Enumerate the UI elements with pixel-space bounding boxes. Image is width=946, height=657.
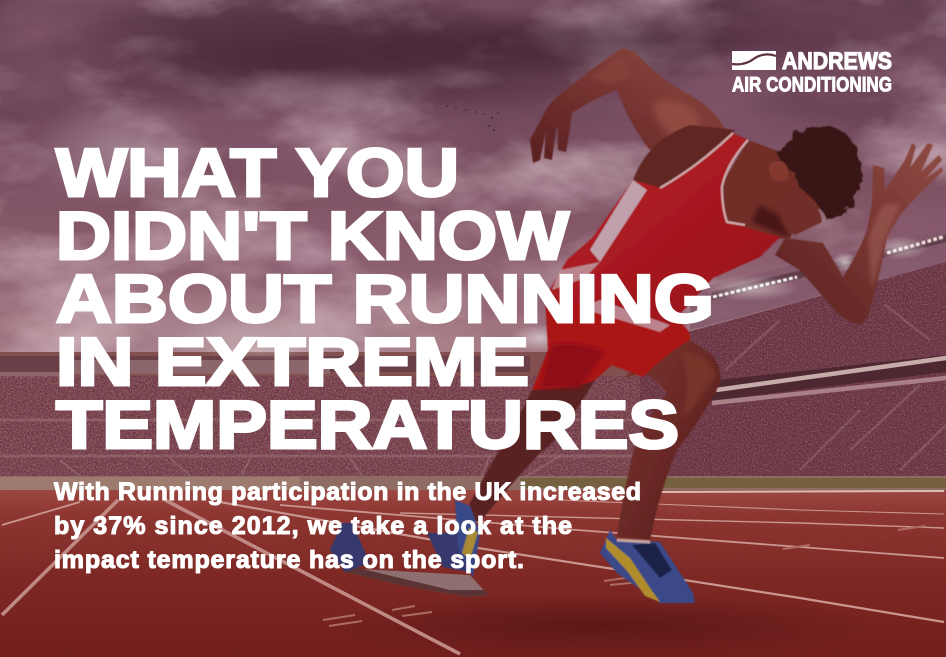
logo mark xyxy=(732,51,776,70)
logo: Andrews Air Conditioning xyxy=(732,48,892,96)
shoe xyxy=(600,530,695,603)
title xyxy=(56,135,714,463)
shorts xyxy=(532,298,690,390)
logo text xyxy=(732,48,892,96)
birds in the distance xyxy=(446,105,499,131)
subtitle text xyxy=(54,478,641,574)
rear arm xyxy=(530,48,727,163)
title: DIDN'T KNOW xyxy=(56,198,570,274)
subtitle text: With Running participation in the UK increased xyxy=(54,478,641,506)
background: infield strip xyxy=(0,476,946,491)
back skin xyxy=(633,125,735,190)
front arm and hand xyxy=(775,143,943,325)
title: IN EXTREME xyxy=(56,324,529,400)
right stand xyxy=(640,262,946,476)
title: ABOUT RUNNING xyxy=(56,261,714,337)
subtitle text: by 37% since 2012, we take a look at the xyxy=(54,512,572,540)
background: stadium stands xyxy=(0,228,946,480)
title: TEMPERATURES xyxy=(56,387,679,463)
stadium roof and floodlights xyxy=(200,228,946,360)
logo text: ANDREWS xyxy=(782,48,892,75)
starting blocks xyxy=(330,523,488,597)
front leg xyxy=(617,330,720,540)
head xyxy=(769,126,860,235)
rear leg and shoe xyxy=(455,380,595,577)
title: WHAT YOU xyxy=(56,135,459,211)
singlet xyxy=(545,133,780,332)
logo text: AIR CONDITIONING xyxy=(732,72,892,96)
background: running track xyxy=(0,490,946,657)
runner xyxy=(455,48,943,603)
background: stormy sky xyxy=(0,0,946,400)
subtitle text: impact temperature has on the sport. xyxy=(54,546,524,574)
neck and face xyxy=(720,140,830,240)
